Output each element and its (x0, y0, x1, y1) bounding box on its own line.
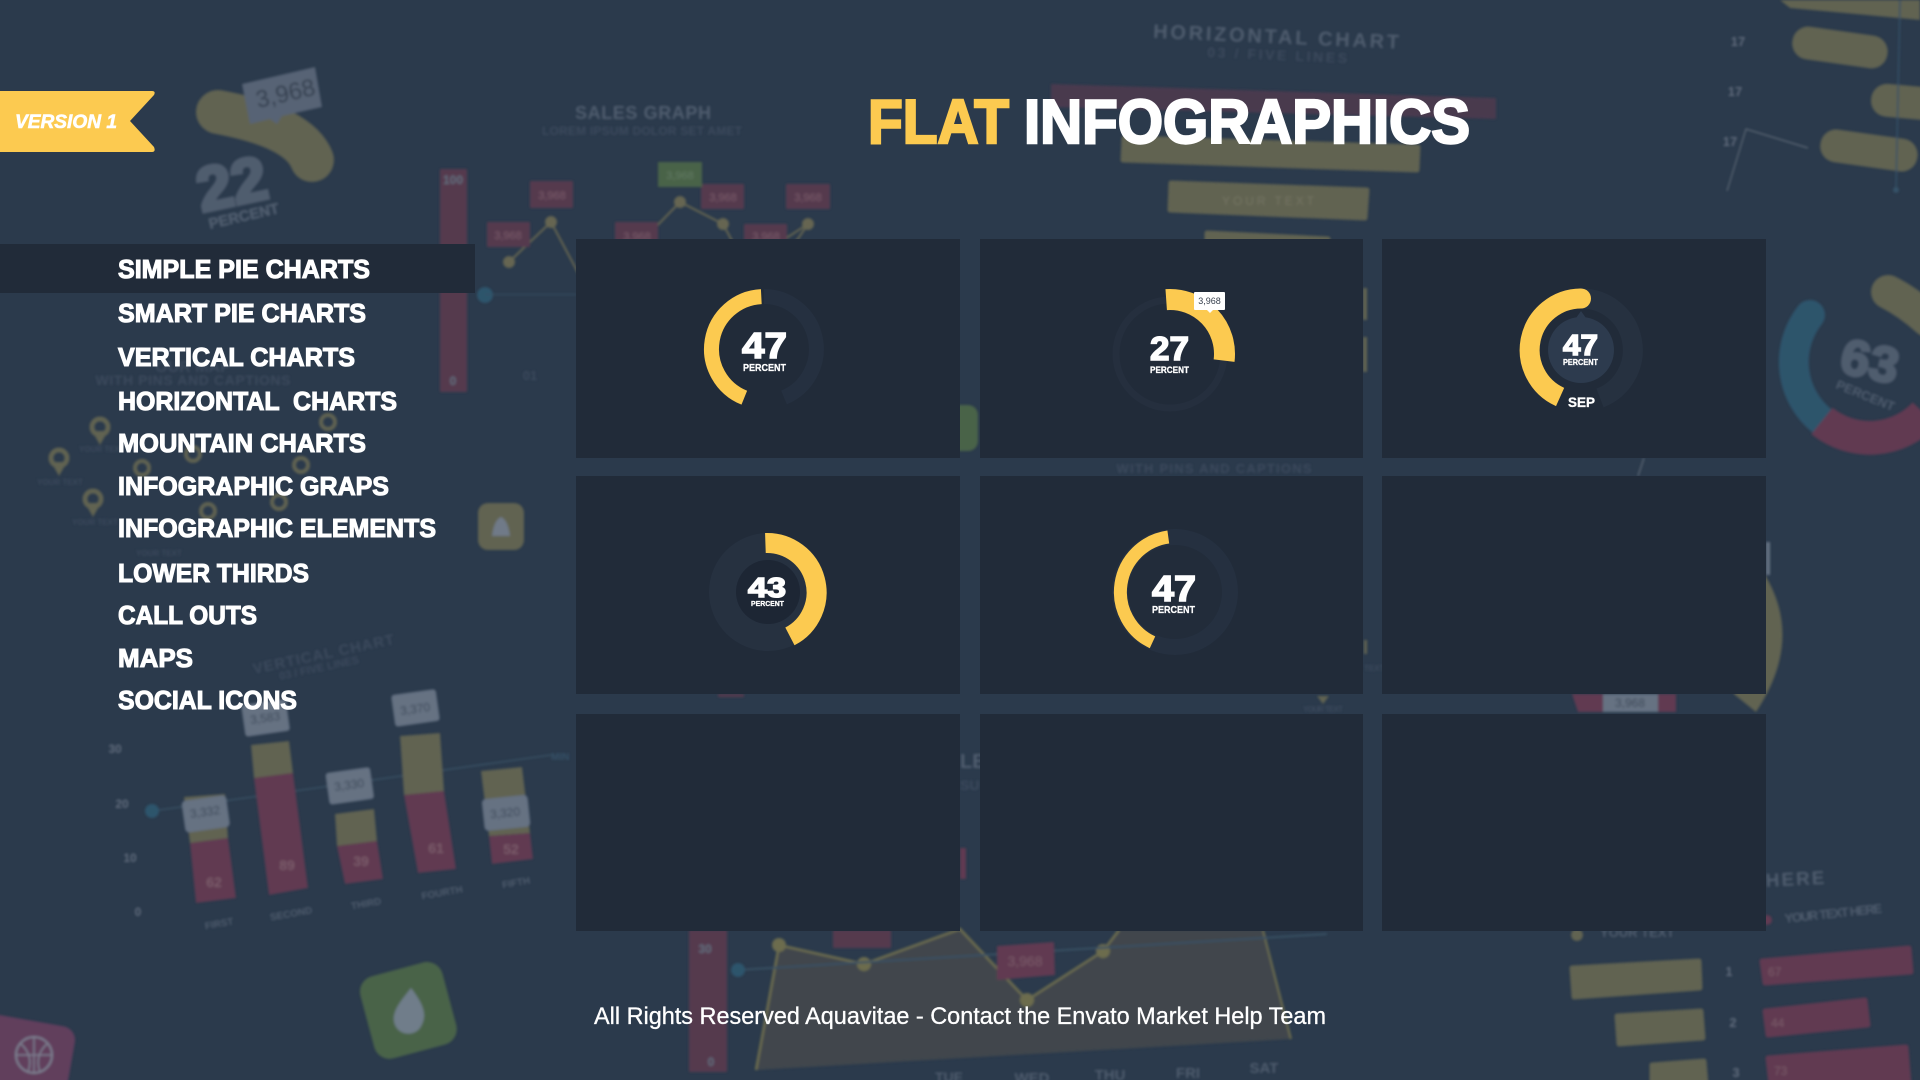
menu list (118, 254, 436, 715)
background rounded bars top right: 17 (1723, 134, 1737, 149)
background mountain chart: SAT (1250, 1060, 1278, 1077)
icon: donut 43 percent: 43 (748, 572, 786, 603)
icon: donut 43 percent: PERCENT (751, 599, 784, 608)
background pie: 22 percent: PERCENT (207, 200, 281, 233)
background rounded bars top right: 17 (1728, 84, 1742, 99)
background rounded bars top right: 17 (1731, 34, 1745, 49)
menu list: MOUNTAIN CHARTS (118, 428, 366, 458)
icon: donut 27 percent with tag: 3,968 (1198, 296, 1221, 306)
panel: row 2 middle (980, 476, 1363, 694)
background sales graph (440, 103, 830, 392)
icon: donut 47 percent on disc: PERCENT (1152, 605, 1195, 616)
background vertical chart: 03 / FIVE LINES (278, 654, 360, 683)
menu list: SMART PIE CHARTS (118, 298, 366, 328)
background sales graph: SALES GRAPH (575, 103, 711, 123)
background horizontal chart: YOUR TEXT (1222, 194, 1315, 208)
background sales graph: 3,968 (666, 170, 694, 182)
background vertical chart: 52 (503, 841, 519, 857)
background horizontal bars bottom right (1571, 868, 1911, 1080)
background vertical chart: 3,320 (489, 804, 521, 822)
icon: simple donut 47 percent (711, 296, 816, 398)
background sales graph: 3,968 (709, 192, 737, 204)
background vertical chart: 61 (428, 840, 444, 856)
icon: donut 47 percent with SEP label: 47 (1563, 330, 1598, 362)
background map pins: YOUR TEXT (72, 518, 118, 527)
panel: highlight bar (0, 244, 475, 293)
icon: simple donut 47 percent: PERCENT (743, 363, 786, 374)
background fragments between panels (718, 405, 1782, 879)
background horizontal bars bottom right: 67 (1768, 965, 1782, 979)
background horizontal bars bottom right: YOUR TEXT (1600, 925, 1674, 940)
background fragments between panels: YOUR TEXT (1303, 705, 1343, 714)
menu list: HORIZONTAL CHARTS (118, 386, 397, 416)
menu list: SIMPLE PIE CHARTS (118, 254, 370, 284)
icon: donut 47 percent on disc: 47 (1152, 568, 1196, 609)
background vertical chart: FIFTH (501, 876, 531, 891)
background sales graph: 3,968 (538, 190, 566, 202)
background pie: 22 percent: 22 (191, 144, 273, 226)
icon: donut 43 percent (709, 533, 827, 651)
panel: row 3 right (1382, 714, 1766, 931)
menu list: CALL OUTS (118, 600, 257, 630)
background mountain chart: 30 (698, 942, 712, 956)
background sales graph: 3,968 (794, 192, 822, 204)
icon: donut 27 percent with tag: PERCENT (1150, 365, 1189, 376)
background pie: 22 percent: 3,968 (253, 74, 318, 114)
panel: row 2 left (576, 476, 960, 694)
background fragments between panels: LE (960, 751, 986, 773)
background vertical chart: 3,330 (333, 776, 365, 794)
title: INFOGRAPHICS (1024, 88, 1470, 157)
background pie: 63 percent: 63 (1836, 328, 1904, 395)
icon: donut 27 percent with tag (1116, 292, 1225, 408)
background fragments between panels: TEXT (1364, 664, 1385, 673)
background horizontal bars bottom right: 73 (1774, 1064, 1788, 1078)
background vertical chart: 62 (206, 874, 222, 890)
background green icon (356, 958, 460, 1062)
menu list: INFOGRAPHIC GRAPS (118, 471, 389, 501)
background horizontal chart: 03 / FIVE LINES (1207, 44, 1348, 66)
background horizontal bars bottom right: 1 (1725, 964, 1733, 979)
background pie: 63 percent: PERCENT (1834, 377, 1897, 414)
background horizontal bars bottom right: HERE (1765, 868, 1827, 892)
menu list: INFOGRAPHIC ELEMENTS (118, 513, 436, 543)
background fragments between panels: SU (960, 777, 979, 793)
background map pins: OUR MAP (155, 359, 231, 376)
ribbon: version 1 (0, 91, 155, 152)
menu list: VERTICAL CHARTS (118, 342, 355, 372)
background vertical chart: 20 (115, 797, 129, 811)
background map pins: YOUR TEXT (37, 478, 83, 487)
background vertical chart: VERTICAL CHART (251, 631, 398, 678)
background horizontal bars bottom right: YOUR TEXT HERE (1784, 901, 1883, 926)
background sales graph: 3,968 (494, 230, 522, 242)
background vertical chart: FOURTH (421, 884, 464, 903)
menu list: MAPS (118, 643, 193, 673)
panel: row 2 right (1382, 476, 1766, 694)
icon: donut 47 percent with SEP label (1530, 288, 1633, 410)
icon: donut 27 percent with tag: 27 (1150, 330, 1189, 367)
background pie: 63 percent (1794, 292, 1920, 438)
menu list: SOCIAL ICONS (118, 685, 297, 715)
background pink icon (0, 1013, 77, 1080)
background sales graph: 3,968 (623, 231, 651, 243)
background vertical chart: MIN (551, 752, 569, 763)
background mountain chart (689, 929, 1327, 1080)
background vertical chart (108, 631, 569, 932)
background pie: 22 percent (191, 67, 322, 233)
background olive icon (478, 503, 524, 550)
background map pins (37, 359, 335, 558)
background vertical chart: 39 (353, 853, 369, 869)
panel: row 3 middle (980, 714, 1363, 931)
ribbon: version 1: VERSION 1 (15, 112, 117, 133)
background vertical chart: FIRST (204, 917, 234, 932)
icon: donut 47 percent with SEP label: SEP (1568, 394, 1595, 410)
icon: simple donut 47 percent: 47 (742, 325, 787, 366)
background horizontal chart (1051, 21, 1496, 372)
panel: row 1 middle (980, 239, 1363, 458)
footer credit: All Rights Reserved Aquavitae - Contact the Envato Market Help Team (594, 1003, 1326, 1030)
panel: row 3 left (576, 714, 960, 931)
background horizontal bars bottom right: 2 (1729, 1015, 1737, 1030)
background vertical chart: THIRD (350, 896, 382, 913)
background vertical chart: 10 (123, 851, 137, 865)
panel: row 1 left (576, 239, 960, 458)
background vertical chart: 3,370 (399, 700, 431, 718)
background vertical chart: 0 (135, 905, 142, 919)
background sales graph: 3,968 (752, 231, 780, 243)
panel: row 1 right (1382, 239, 1766, 458)
background vertical chart: 3,332 (189, 803, 221, 821)
icon: donut 47 percent on disc (1112, 529, 1238, 655)
background rounded bars top right (1723, 0, 1920, 193)
background sales graph: LOREM IPSUM DOLOR SET AMET (542, 124, 743, 138)
background fragments between panels: 3,968 (1615, 696, 1645, 710)
background fragments between panels: WITH PINS AND CAPTIONS (1116, 461, 1312, 476)
menu list: LOWER THIRDS (118, 558, 309, 588)
icon: donut 47 percent with SEP label: PERCENT (1563, 357, 1599, 367)
background map pins: WITH PINS AND CAPTIONS (96, 372, 290, 388)
background vertical chart: SECOND (269, 905, 313, 924)
background map pins: YOUR TEXT (136, 549, 182, 558)
background mountain chart: 3,968 (1007, 953, 1043, 969)
background map pins: YOUR TEXT (79, 445, 125, 454)
background sales graph: 100 (443, 173, 463, 187)
background vertical chart: 3,583 (249, 709, 281, 727)
background sales graph: 0 (450, 374, 457, 388)
background sales graph: 01 (523, 368, 537, 383)
background vertical chart: 89 (279, 857, 295, 873)
background vertical chart: 30 (108, 742, 122, 756)
background horizontal bars bottom right: 3 (1732, 1065, 1740, 1080)
background horizontal bars bottom right: 44 (1771, 1016, 1785, 1030)
background mountain chart: 0 (708, 1055, 715, 1069)
background horizontal chart: HORIZONTAL CHART (1153, 21, 1402, 54)
title: FLAT (868, 88, 1009, 157)
